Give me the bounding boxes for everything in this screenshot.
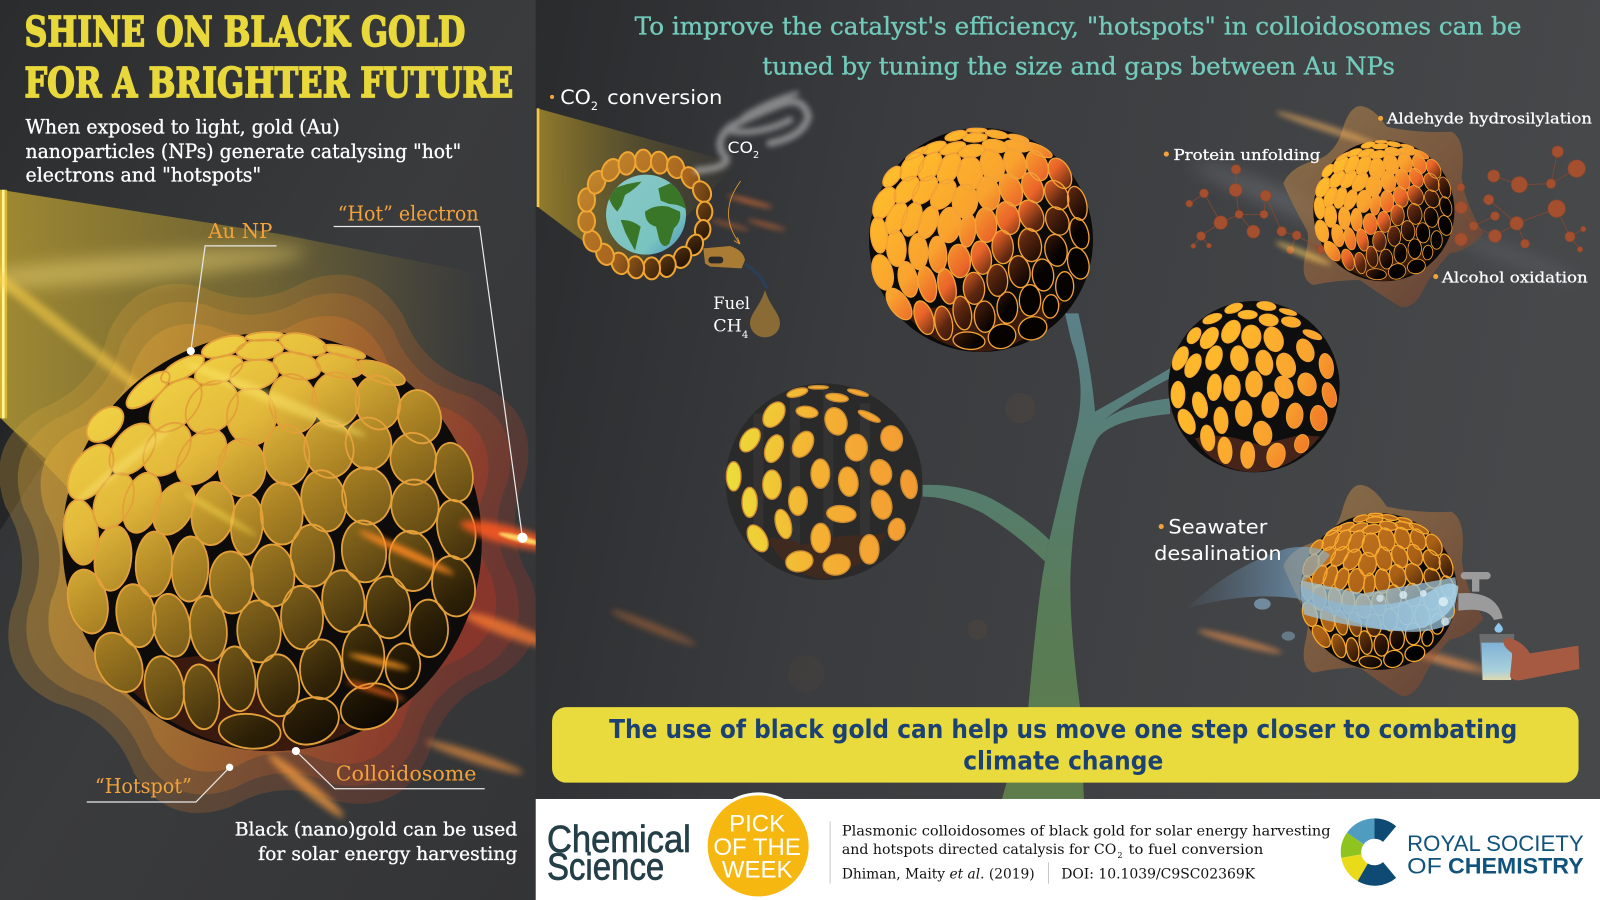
Chemical Science logo: Science (547, 846, 664, 888)
label: CO2 conversion: 2 (591, 100, 598, 113)
catalysis cluster: small colloidosome with molecules (1186, 106, 1586, 307)
label: CO2 conversion: CO (560, 86, 591, 109)
label: CO2: CO (728, 138, 753, 157)
callout: Au NP: Au NP (207, 219, 272, 243)
solar harvesting text: for solar energy harvesting (258, 843, 517, 865)
background light streaks (609, 154, 1580, 692)
water wave (1187, 547, 1458, 641)
RSC logo: CHEMISTRY (1448, 853, 1584, 878)
CO2 conversion illustration (537, 93, 808, 337)
label: aldehyde hydrosilylation: Aldehyde hydrosilylation (1386, 109, 1592, 127)
solar harvesting text: Black (nano)gold can be used (235, 819, 517, 841)
arrow (728, 181, 741, 244)
badge: pick of the week: OF THE (713, 834, 801, 861)
wavy glow layers (0, 274, 536, 814)
intro text: electrons and "hotspots" (26, 164, 261, 187)
callout: Au NP (187, 219, 277, 355)
small dense sphere (1313, 140, 1454, 282)
heading: To improve the catalyst's efficiency, "hotspots" in colloidosomes can be (635, 13, 1521, 41)
callout: colloidosome: Colloidosome (336, 762, 477, 786)
label: CO2: 2 (753, 150, 759, 161)
hand (1504, 638, 1579, 680)
fuel nozzle (703, 246, 767, 288)
badge: pick of the week (706, 794, 810, 898)
paper citation: and hotspots directed catalysis for CO (842, 842, 1116, 858)
conclusion banner (552, 707, 1579, 783)
light beam (538, 109, 712, 276)
molecule: left (1186, 165, 1325, 254)
RSC logo: OF (1407, 853, 1442, 878)
sphere: large dense colloidosome (869, 128, 1093, 352)
label: alcohol oxidation: Alcohol oxidation (1441, 269, 1588, 287)
water drop (1494, 623, 1503, 633)
hot electron streak (457, 516, 536, 555)
label: CO2 (728, 142, 758, 158)
background: right panel (536, 0, 1600, 799)
faucet (1458, 572, 1503, 620)
footer (536, 794, 1600, 900)
main colloidosome sphere (62, 331, 482, 752)
molecule: right (1455, 146, 1586, 252)
water inside sphere (1300, 577, 1458, 632)
intro text: When exposed to light, gold (Au) (26, 116, 340, 139)
energy streaks (710, 194, 786, 232)
paper citation: to fuel conversion (1129, 842, 1263, 858)
label: seawater desalination: desalination (1154, 542, 1282, 565)
paper citation: 2 (1117, 850, 1123, 860)
Chemical Science logo: Chemical (547, 818, 691, 860)
fuel droplet (750, 290, 780, 337)
RSC logo (1351, 829, 1584, 878)
title (24, 8, 513, 107)
label: protein unfolding: Protein unfolding (1173, 146, 1321, 164)
paper citation (830, 821, 1331, 884)
intro text: nanoparticles (NPs) generate catalysing "hot" (26, 140, 461, 163)
ring of gold nanoparticles (578, 150, 715, 279)
title: FOR A BRIGHTER FUTURE (24, 59, 513, 107)
glass of water (1479, 634, 1514, 680)
callout: colloidosome (292, 747, 485, 789)
label: seawater desalination (1154, 516, 1282, 565)
label: fuel (714, 296, 750, 338)
label: seawater desalination: Seawater (1168, 516, 1267, 539)
desalination sphere (1296, 509, 1464, 677)
label: fuel: Fuel (713, 293, 750, 313)
conclusion banner: The use of black gold can help us move one step closer to combating (609, 715, 1517, 745)
conclusion banner: climate change (963, 746, 1163, 776)
callout: hotspot: “Hotspot” (95, 774, 192, 798)
background: left panel (0, 0, 536, 900)
label: fuel: CH (713, 316, 742, 336)
solar harvesting text (235, 819, 517, 865)
RSC logo: ROYAL SOCIETY (1407, 831, 1584, 856)
glow streak (1197, 627, 1283, 657)
badge: pick of the week: PICK (729, 811, 785, 838)
paper citation: Dhiman, Maity et al. (2019) (842, 867, 1035, 883)
title: SHINE ON BLACK GOLD (24, 8, 465, 56)
panel: black gold colloidosome (0, 190, 536, 821)
callout: hot electron (334, 201, 528, 543)
sphere: left sparse colloidosome (726, 383, 922, 580)
glow streaks (1275, 108, 1376, 144)
paper citation: DOI: 10.1039/C9SC02369K (1061, 867, 1255, 883)
sphere streak highlights (73, 357, 456, 702)
label: CO2 conversion: conversion (607, 86, 722, 109)
paper citation: Plasmonic colloidosomes of black gold for solar energy harvesting (842, 824, 1331, 840)
badge: pick of the week: WEEK (722, 857, 792, 884)
label: fuel: 4 (742, 330, 748, 341)
right panel illustrations (537, 13, 1592, 800)
blob backdrop (1283, 106, 1483, 307)
smoke (697, 93, 808, 171)
heading (635, 13, 1521, 80)
label: alcohol oxidation (1433, 271, 1588, 283)
seawater desalination illustration (1187, 485, 1579, 696)
label: CO2 conversion (550, 89, 721, 110)
sphere: right sparse colloidosome (1168, 300, 1340, 472)
Chemical Science logo (547, 818, 691, 888)
intro text (26, 116, 461, 187)
Au nanoparticle outlines (59, 330, 481, 751)
light beam from the left (0, 190, 439, 530)
light streaks behind sphere (0, 239, 559, 822)
callout: hotspot (87, 764, 233, 802)
tree (923, 313, 1170, 800)
heading: tuned by tuning the size and gaps between Au NPs (762, 52, 1395, 80)
callout: hot electron: “Hot” electron (338, 201, 479, 225)
blob backdrop (1283, 485, 1483, 696)
earth (606, 175, 690, 255)
